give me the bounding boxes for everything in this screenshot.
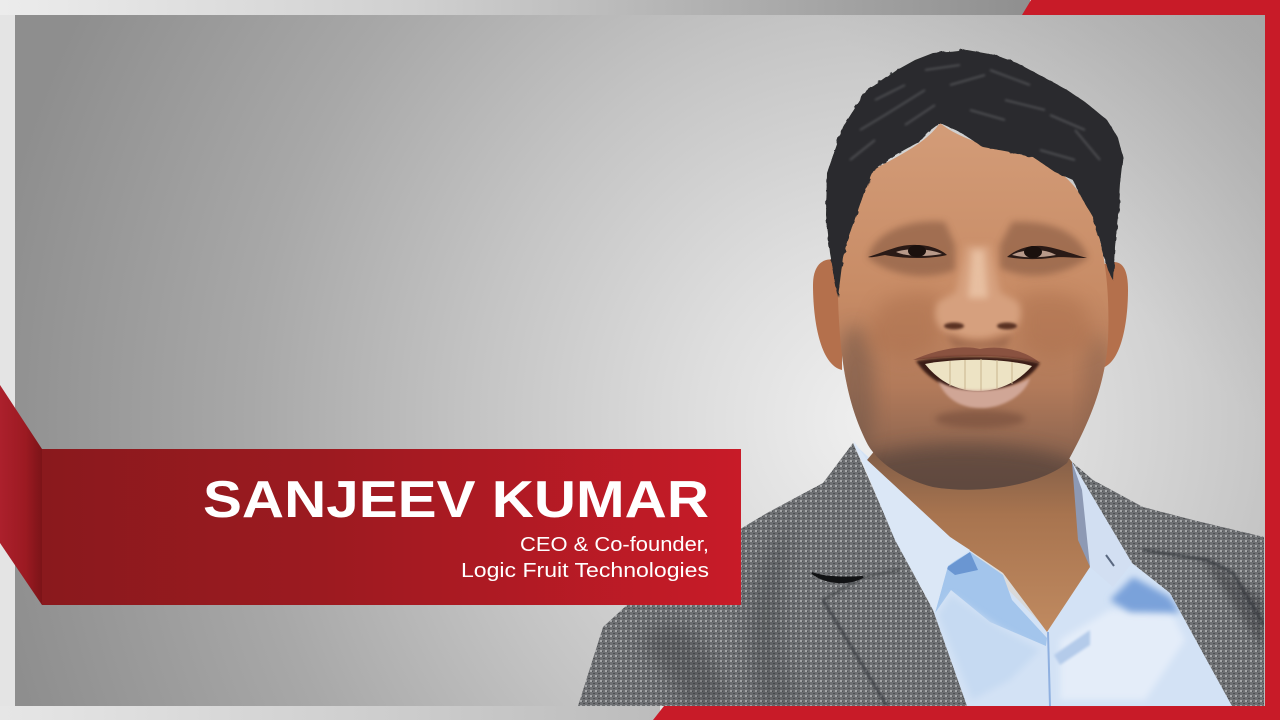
portrait [578,50,1264,706]
left collar [853,440,970,613]
ears [813,259,1128,370]
smile [913,347,1040,408]
company: Logic Fruit Technologies [461,560,709,582]
nose [935,245,1021,347]
shirt [853,443,1232,706]
right collar [1072,462,1132,587]
red frame accent [653,0,1280,720]
hair [826,50,1123,297]
eyes [868,245,1087,259]
right lapel edge [1143,550,1264,625]
name: SANJEEV KUMAR [203,471,709,529]
banner body [42,449,741,605]
neck [867,420,1090,632]
chin shadow [871,435,1072,490]
name banner [0,385,741,605]
cheek shading [876,294,935,350]
jacket [578,443,1264,706]
face [835,123,1112,512]
lapel notch [812,573,863,582]
banner fold [0,385,42,605]
job title: CEO & Co-founder, [520,534,709,556]
left lapel edge [823,570,900,600]
eye socket shadows [868,221,955,276]
